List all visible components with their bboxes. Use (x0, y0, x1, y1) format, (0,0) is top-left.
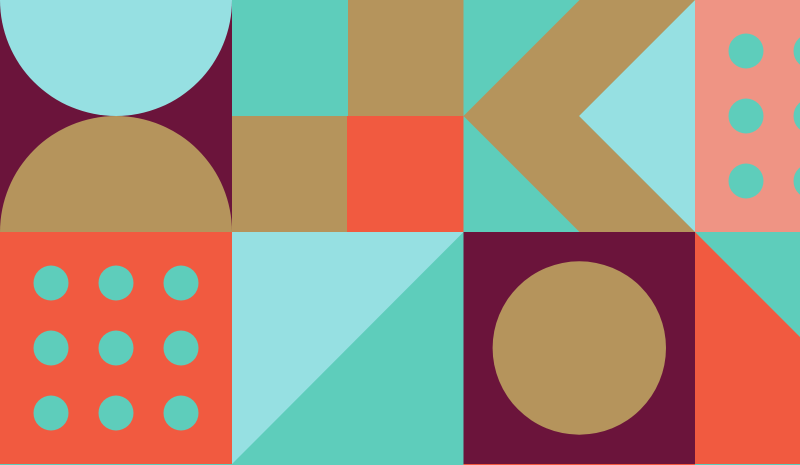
panel: red dotted tile (0, 232, 232, 465)
panel: red and teal triangle tile (695, 232, 800, 465)
panel: maroon tile with two semicircles (0, 0, 232, 232)
panel: four-square block (232, 0, 464, 232)
bottom edge strip (0, 464, 800, 465)
panel: pink dotted tile (695, 0, 800, 232)
panel: chevron tile (464, 0, 695, 232)
panel: maroon tile with tan circle (464, 232, 695, 464)
panel: diagonal split tile (232, 232, 464, 465)
